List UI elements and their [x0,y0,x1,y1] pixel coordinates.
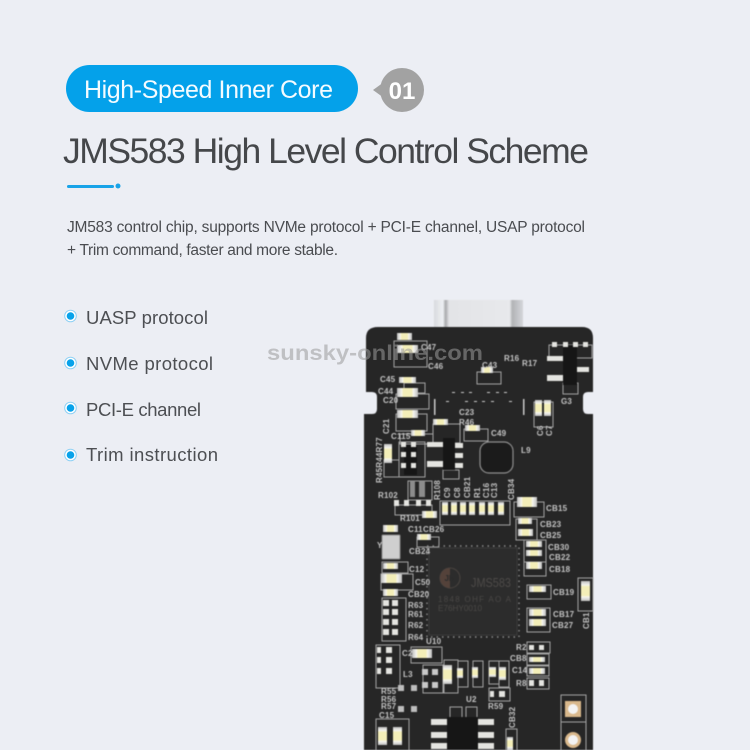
silkscreen labels: C44 [378,387,394,396]
silkscreen labels: L3 [403,670,413,679]
silkscreen labels: C49 [491,429,507,438]
JMS583 controller chip: E76HY0010 [438,604,483,613]
silkscreen labels: C15 [379,711,395,720]
silkscreen labels: U2 [466,695,477,704]
circuit board product image [364,300,593,750]
component outlines [376,341,593,750]
silkscreen labels: CB1 [582,612,591,629]
mounting pads [565,701,581,746]
watermark: sunsky-online.com [267,341,483,365]
silkscreen labels: C8 [453,487,462,498]
JMS583 controller chip [427,546,519,637]
JMS583 controller chip: 1848 OHF AO A [438,595,512,604]
description text: JM583 control chip, supports NVMe protocol + PCI-E channel, USAP protocol [67,219,585,236]
dual-row IC U2 [431,717,494,750]
silkscreen labels: C20 [383,396,399,405]
silkscreen labels: R108 [433,480,442,500]
silkscreen labels: C9 [443,487,452,498]
title underline accent [67,184,120,188]
silkscreen labels: CB26 [423,525,445,534]
silkscreen labels: R16 [504,354,520,363]
silkscreen labels: R1 [473,487,482,498]
feature: UASP protocol: UASP protocol [86,307,208,328]
silkscreen labels: R56 [381,695,397,704]
silkscreen labels: CB32 [508,706,517,728]
silkscreen labels: C6 [536,425,545,436]
silkscreen labels: CB19 [553,588,575,597]
silkscreen labels: R45R44R77 [375,437,384,483]
silkscreen labels: L9 [521,446,531,455]
silkscreen labels: R63 [408,601,424,610]
title: JMS583 High Level Control Scheme [63,131,589,171]
number badge 01 [373,68,424,112]
description text: + Trim command, faster and more stable. [67,242,338,259]
silkscreen labels: CB23 [540,520,562,529]
heading pill: High-Speed Inner Core [66,65,358,112]
description text [67,219,585,259]
silkscreen labels: C115 [391,432,411,441]
silkscreen labels: C2 [402,649,413,658]
silkscreen labels: C45 [380,375,396,384]
silkscreen labels: C16 [482,482,491,498]
silkscreen labels: CB22 [549,553,571,562]
USB-C connector [434,300,523,328]
silkscreen labels: C47 [421,343,437,352]
silkscreen labels: CB15 [546,504,568,513]
silkscreen labels: C12 [409,565,425,574]
feature list [65,307,218,465]
silkscreen labels: R46 [459,418,475,427]
silkscreen labels: C13 [490,482,499,498]
silkscreen labels: R64 [408,633,424,642]
fine silkscreen ticks [434,392,524,415]
capacitors and resistors [378,333,590,750]
silkscreen labels: C11 [408,525,423,534]
silkscreen labels: C7 [545,425,554,436]
silkscreen labels: R2 [516,643,527,652]
feature: Trim instruction: Trim instruction [86,444,218,465]
silkscreen labels [375,343,591,728]
feature: PCI-E channel: PCI-E channel [86,399,201,420]
silkscreen labels: R55 [381,687,397,696]
silkscreen labels: R62 [408,621,424,630]
silkscreen labels: CB18 [549,565,571,574]
silkscreen labels: R101 [400,514,420,523]
silkscreen labels: R17 [522,359,538,368]
JMS583 controller chip: JMS583 [471,575,511,590]
silkscreen labels: R59 [488,702,504,711]
silkscreen labels: R61 [408,610,424,619]
transistors and solder pads [377,342,589,712]
silkscreen labels: C14 [512,666,528,675]
silkscreen labels: C23 [459,408,475,417]
feature: NVMe protocol: NVMe protocol [86,353,213,374]
silkscreen labels: CB24 [409,547,431,556]
silkscreen labels: C43 [482,361,498,370]
silkscreen labels: R8 [516,679,527,688]
silkscreen labels: C21 [382,418,391,434]
silkscreen labels: G3 [561,397,572,406]
silkscreen labels: R57 [381,702,397,711]
crystal Y [382,535,400,559]
silkscreen labels: C50 [415,578,431,587]
heading pill: High-Speed Inner Core: High-Speed Inner Core [84,76,333,104]
silkscreen labels: CB17 [553,610,575,619]
silkscreen labels: CB30 [548,543,570,552]
board body [364,327,593,750]
inductor L9 [480,442,513,473]
silkscreen labels: CB27 [552,621,574,630]
JMS583 controller chip: JM [444,574,456,583]
number badge 01: 01 [389,78,415,105]
silkscreen labels: CB20 [408,590,430,599]
silkscreen labels: CB8 [510,654,527,663]
silkscreen labels: C46 [428,362,444,371]
silkscreen labels: CB34 [507,478,516,500]
silkscreen labels: U10 [426,637,442,646]
silkscreen labels: CB21 [463,476,472,498]
silkscreen labels: R102 [378,491,398,500]
silkscreen labels: CB25 [540,531,562,540]
silkscreen labels: Y [377,541,383,550]
